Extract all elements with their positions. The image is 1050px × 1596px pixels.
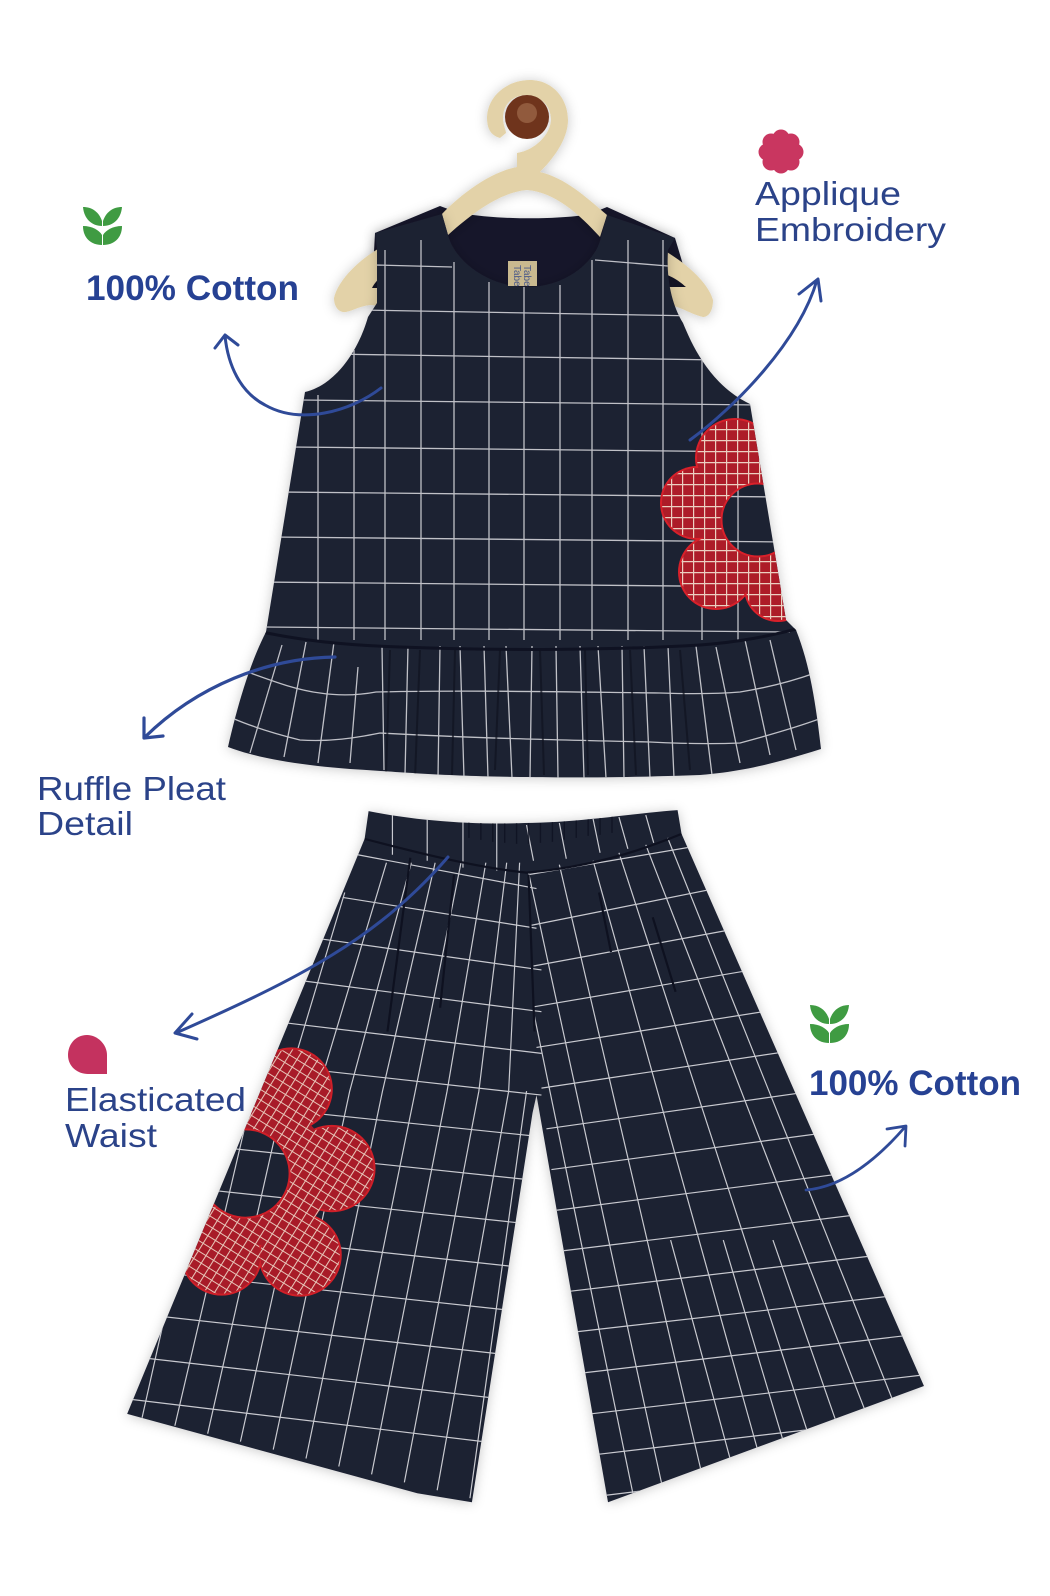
garment front [228,214,821,777]
label: 100% Cotton [809,1064,1021,1103]
garment back layer [372,206,690,300]
check grid on top [232,240,822,778]
callout: Elasticated Waist [65,857,448,1154]
callout: Ruffle Pleat Detail: Detail [37,805,133,842]
check grid on left leg [119,813,541,1498]
hanger knob [505,95,549,139]
arrow [215,335,381,415]
arrow [690,279,821,440]
callout: 100% Cotton (pants) [806,1005,1021,1190]
icon: pink flower [758,130,804,174]
arrow [806,1126,906,1190]
icon: green leaves [83,207,122,245]
hanger [334,80,713,317]
waistband and pleats [365,816,682,1032]
icon: pink drop [68,1035,107,1074]
arrow [175,857,448,1039]
callout: 100% Cotton (top) [83,207,381,415]
appliqué flower [660,418,787,622]
check grid on right leg [527,815,944,1495]
neck label: Tabe [521,265,532,287]
callout: Elasticated Waist: Waist [65,1117,157,1154]
label: 100% Cotton [86,269,299,308]
pants garment [119,810,944,1502]
label: Ruffle Pleat [37,770,226,807]
top garment with hanger [228,80,822,778]
appliqué flower on pants [181,1047,376,1297]
icon: green leaves [810,1005,849,1043]
neck label: Tabe [511,265,522,287]
ruffle seam and gathers [262,628,800,649]
label: Applique [755,175,901,212]
callout: Applique Embroidery: Embroidery [755,211,947,248]
arrow [144,657,335,738]
callout: Ruffle Pleat Detail [37,657,335,842]
neck label [508,261,537,287]
callout: Applique Embroidery [690,130,947,440]
label: Elasticated [65,1081,246,1118]
